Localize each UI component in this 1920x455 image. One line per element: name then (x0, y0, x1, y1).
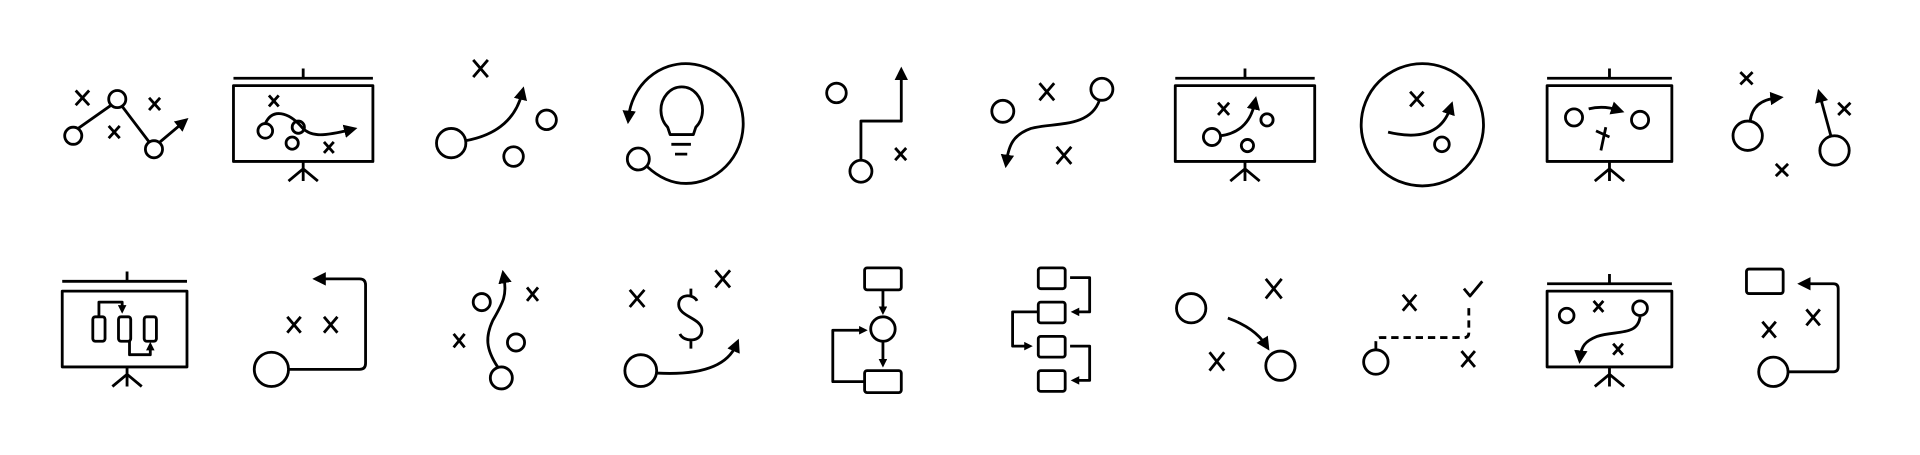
icon: circle play (1361, 64, 1483, 186)
icon: return to box (1746, 269, 1838, 387)
icon: money route (625, 270, 736, 387)
icon: lightbulb cycle (627, 64, 743, 183)
icon: hierarchy steps (1013, 268, 1090, 391)
icon: presentation board route (1547, 274, 1672, 387)
icon: curved arrow play (437, 60, 556, 166)
icon: presentation board play (233, 68, 373, 181)
icon: presentation board arrow (1547, 68, 1672, 181)
icon: wiggly route (454, 276, 538, 389)
icon: flowchart (833, 268, 901, 393)
icon: wave downward (992, 78, 1113, 164)
icon: return route (254, 279, 366, 387)
icon: step path (827, 73, 906, 182)
icon: dashed route check (1364, 281, 1482, 374)
icon: presentation board curve (1175, 68, 1315, 181)
icon: zigzag play path (65, 91, 183, 158)
icon: two player routes (1733, 72, 1850, 176)
icon: presentation board process (62, 272, 187, 387)
icon: pass play (1176, 279, 1295, 380)
